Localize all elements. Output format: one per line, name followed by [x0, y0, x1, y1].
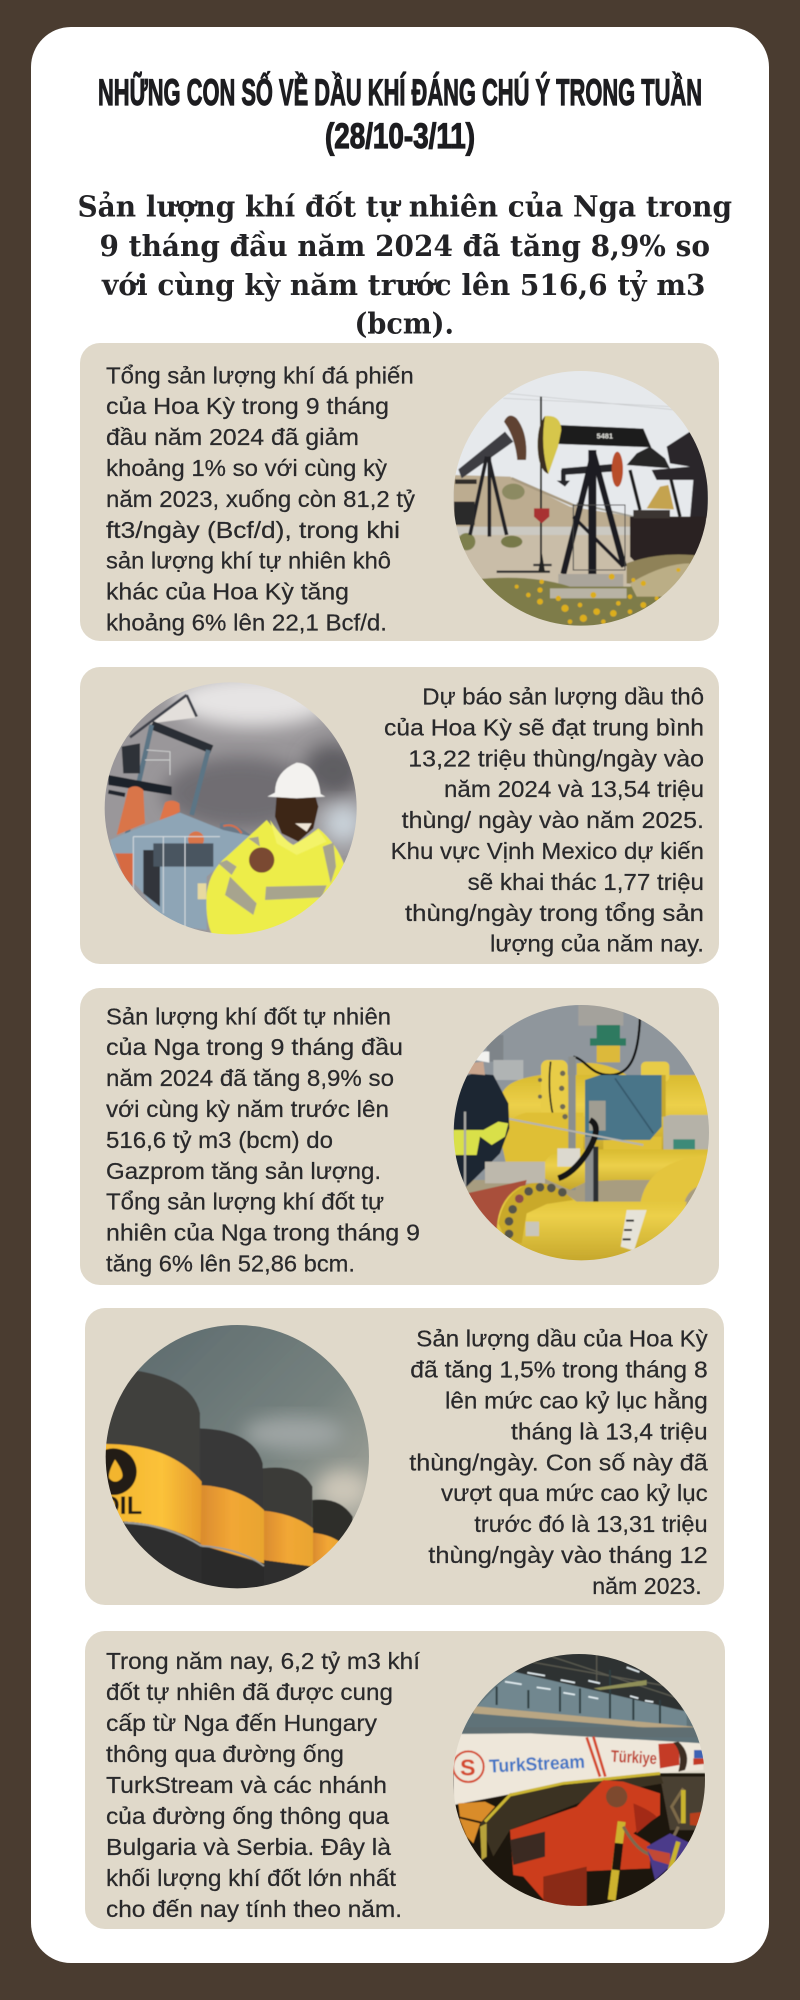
text: US crude oil forecast: sẽ khai thác 1,77 triệu — [468, 869, 704, 895]
panel: US oil record — [85, 1308, 724, 1605]
text: Russian natural gas output: Gazprom tăng sản lượng. — [106, 1158, 381, 1184]
text: US oil output record: tháng là 13,4 triệu — [511, 1418, 708, 1444]
text: US shale gas output: khoảng 1% so với cùng kỳ — [106, 455, 387, 481]
text: Russian natural gas output: với cùng kỳ năm trước lên — [106, 1096, 389, 1122]
text: US crude oil forecast: năm 2024 và 13,54 triệu — [444, 776, 704, 802]
photo: oil barrels — [90, 1323, 373, 1593]
text: US oil output record — [409, 1326, 709, 1599]
photo: oil barrels: OIL — [100, 1492, 142, 1520]
text: US crude oil forecast: lượng của năm nay. — [490, 931, 704, 957]
text: Russian natural gas output: tăng 6% lên 52,86 bcm. — [106, 1250, 355, 1276]
panel: US shale gas — [80, 343, 719, 641]
photo: TurkStream pipeline — [450, 1650, 710, 1917]
text: TurkStream gas supply — [106, 1648, 420, 1922]
text: US shale gas output — [106, 362, 415, 636]
text: Russian natural gas output: 516,6 tỷ m3 (bcm) do — [106, 1127, 333, 1153]
text: Russian natural gas output: năm 2024 đã tăng 8,9% so — [106, 1065, 394, 1091]
text: Russian natural gas output: nhiên của Nga trong tháng 9 — [106, 1220, 420, 1246]
text: US shale gas output: Tổng sản lượng khí đá phiến — [106, 362, 414, 388]
text: US oil output record: đã tăng 1,5% trong tháng 8 — [410, 1357, 708, 1383]
text: US shale gas output: khoảng 6% lên 22,1 Bcf/d. — [106, 610, 387, 636]
photo: yellow gas pipes — [450, 1000, 713, 1267]
title: (28/10-3/11) — [325, 117, 475, 156]
subheading — [78, 190, 732, 340]
text: TurkStream gas supply: cấp từ Nga đến Hungary — [106, 1710, 377, 1736]
text: US crude oil forecast: 13,22 triệu thùng/ngày vào — [408, 745, 704, 771]
text: TurkStream gas supply: khối lượng khí đốt lớn nhất — [106, 1865, 396, 1891]
text: US crude oil forecast: thùng/ ngày vào năm 2025. — [402, 807, 704, 833]
text: US shale gas output: ft3/ngày (Bcf/d), trong khi — [106, 517, 400, 543]
panel: US crude forecast — [80, 667, 719, 964]
text: US crude oil forecast: thùng/ngày trong tổng sản — [405, 900, 704, 926]
text: US crude oil forecast: của Hoa Kỳ sẽ đạt trung bình — [384, 714, 704, 740]
photo: smiling oil worker — [104, 682, 357, 934]
text: US oil output record: năm 2023. — [592, 1573, 702, 1599]
subheading: với cùng kỳ năm trước lên 516,6 tỷ m3 — [101, 268, 706, 302]
text: Russian natural gas output: Tổng sản lượng khí đốt tự — [106, 1189, 384, 1215]
text: US crude oil forecast: Dự báo sản lượng dầu thô — [422, 684, 704, 710]
text: TurkStream gas supply: của đường ống thông qua — [106, 1803, 390, 1829]
text: US shale gas output: năm 2023, xuống còn 81,2 tỷ — [106, 486, 415, 512]
text: TurkStream gas supply: Bulgaria và Serbia. Đây là — [106, 1834, 392, 1860]
text: US shale gas output: sản lượng khí tự nhiên khô — [106, 548, 391, 574]
text: Russian natural gas output — [106, 1003, 420, 1276]
text: US oil output record: Sản lượng dầu của Hoa Kỳ — [416, 1326, 708, 1352]
text: US shale gas output: khác của Hoa Kỳ tăng — [106, 579, 349, 605]
text: US crude oil forecast: Khu vực Vịnh Mexico dự kiến — [391, 838, 704, 864]
title — [98, 71, 702, 156]
text: TurkStream gas supply: thông qua đường ống — [106, 1741, 344, 1767]
subheading: Sản lượng khí đốt tự nhiên của Nga trong — [78, 190, 732, 224]
text: US oil output record: thùng/ngày. Con số này đã — [409, 1449, 709, 1475]
text: US oil output record: vượt qua mức cao kỷ lục — [441, 1480, 708, 1506]
text: US crude oil forecast — [384, 684, 704, 957]
text: Russian natural gas output: Sản lượng khí đốt tự nhiên — [106, 1003, 391, 1029]
text: TurkStream gas supply: Trong năm nay, 6,2 tỷ m3 khí — [106, 1648, 420, 1674]
subheading: 9 tháng đầu năm 2024 đã tăng 8,9% so — [100, 229, 710, 263]
text: US oil output record: trước đó là 13,31 triệu — [474, 1511, 708, 1537]
photo: TurkStream pipeline: Türkiye — [610, 1747, 657, 1768]
text: TurkStream gas supply: TurkStream và các nhánh — [106, 1772, 387, 1798]
text: US oil output record: lên mức cao kỷ lục hằng — [445, 1388, 708, 1414]
panel: TurkStream to Hungary — [85, 1631, 725, 1929]
photo: pumpjacks in a field: 5481 — [597, 431, 613, 440]
subheading: (bcm). — [354, 306, 454, 340]
photo: TurkStream pipeline: S — [460, 1754, 476, 1780]
text: US shale gas output: đầu năm 2024 đã giảm — [106, 424, 359, 450]
text: TurkStream gas supply: đốt tự nhiên đã được cung — [106, 1679, 393, 1705]
text: US oil output record: thùng/ngày vào tháng 12 — [428, 1542, 708, 1568]
text: Russian natural gas output: của Nga trong 9 tháng đầu — [106, 1034, 403, 1060]
text: TurkStream gas supply: cho đến nay tính theo năm. — [106, 1896, 402, 1922]
text: US shale gas output: của Hoa Kỳ trong 9 tháng — [106, 393, 389, 419]
photo: pumpjacks in a field — [450, 367, 713, 637]
photo: TurkStream pipeline: TurkStream — [488, 1751, 585, 1777]
panel: Russian gas output — [80, 988, 719, 1285]
